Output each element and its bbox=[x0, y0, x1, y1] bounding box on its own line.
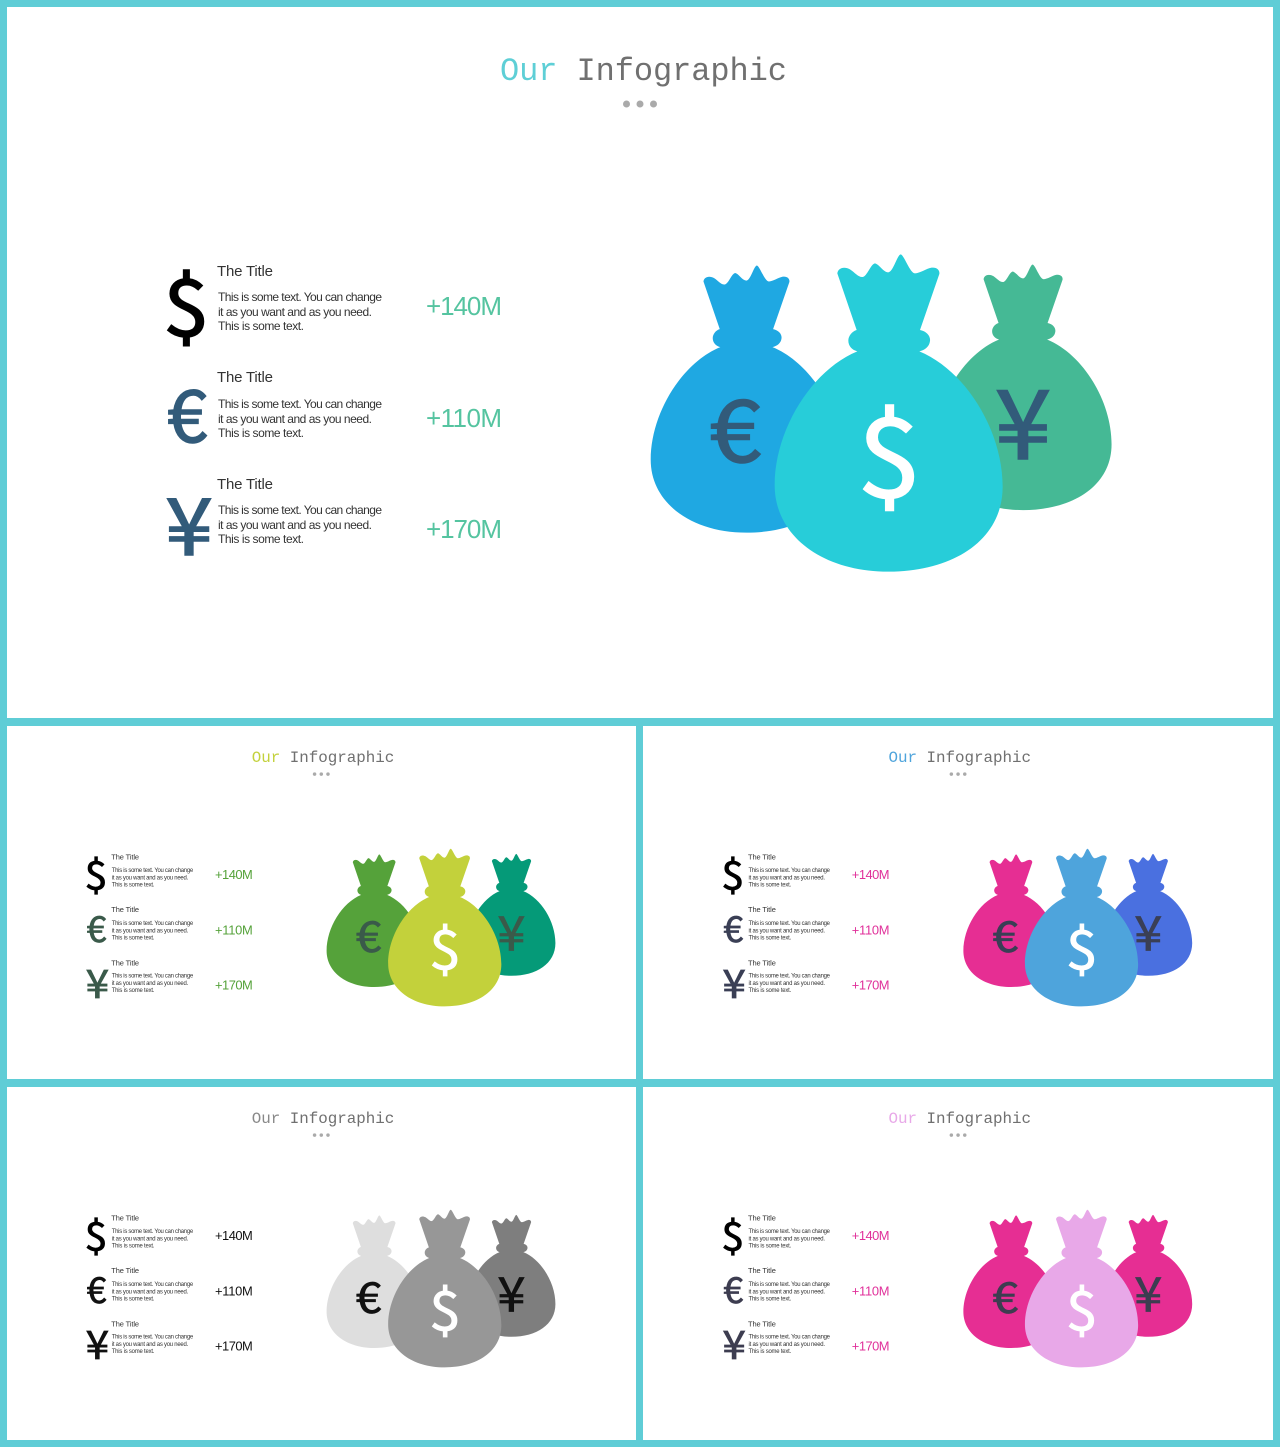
text block: row 3: This is some text. You can change bbox=[112, 1335, 194, 1341]
money bags: € bbox=[992, 902, 1018, 964]
text block: row 2: The Title bbox=[748, 1266, 776, 1275]
text block: row 3: This is some text. bbox=[749, 988, 792, 994]
text block: row 2: This is some text. bbox=[112, 935, 155, 941]
text block: row 3 bbox=[217, 476, 382, 546]
icon: dollar: $ bbox=[721, 1205, 744, 1262]
value: 110M: +110M bbox=[426, 403, 502, 433]
text block: row 3 bbox=[111, 1319, 194, 1355]
text block: row 1: it as you want and as you need. bbox=[749, 1236, 825, 1242]
title: Our Infographic bbox=[500, 53, 787, 90]
money bags: ¥ bbox=[497, 896, 525, 965]
text block: row 3: it as you want and as you need. bbox=[749, 981, 825, 987]
title: Our Infographic bbox=[252, 749, 394, 767]
money bags bbox=[327, 1210, 555, 1367]
title: Our Infographic bbox=[889, 1110, 1031, 1128]
money bags: $ bbox=[1066, 1268, 1098, 1347]
text block: row 3: The Title bbox=[748, 1319, 776, 1328]
money bags: € bbox=[356, 1263, 382, 1325]
text block: row 1: This is some text. bbox=[112, 1243, 155, 1249]
text block: row 1: This is some text. bbox=[749, 882, 792, 888]
value: 110M: +110M bbox=[852, 1284, 890, 1299]
text block: row 2 bbox=[748, 905, 831, 941]
text block: row 1 bbox=[111, 1214, 194, 1249]
text block: row 1: The Title bbox=[748, 853, 776, 862]
text block: row 1 bbox=[111, 853, 194, 888]
text block: row 3 bbox=[748, 1319, 831, 1355]
text block: row 3: The Title bbox=[217, 476, 273, 493]
text block: row 2: This is some text. You can change bbox=[218, 397, 382, 411]
text block: row 2 bbox=[111, 1266, 194, 1302]
panel: main slide, teal bbox=[7, 7, 1273, 718]
text block: row 2: The Title bbox=[217, 369, 273, 386]
icon: yen: ¥ bbox=[165, 464, 213, 578]
text block: row 1: it as you want and as you need. bbox=[112, 875, 189, 881]
text block: row 1 bbox=[217, 263, 382, 333]
text block: row 3: it as you want and as you need. bbox=[112, 1342, 189, 1348]
text block: row 3: it as you want and as you need. bbox=[749, 1342, 825, 1348]
value: 140M: +140M bbox=[426, 291, 502, 321]
text block: row 1: This is some text. You can change bbox=[112, 1229, 194, 1235]
money bags bbox=[963, 1210, 1192, 1367]
text block: row 2: The Title bbox=[748, 905, 776, 914]
text block: row 1: The Title bbox=[217, 263, 273, 280]
text block: row 1 bbox=[748, 853, 831, 888]
value: 140M: +140M bbox=[215, 1228, 253, 1243]
text block: row 2: it as you want and as you need. bbox=[749, 1290, 825, 1296]
text block: row 1: The Title bbox=[111, 1214, 139, 1223]
icon: yen: ¥ bbox=[86, 1314, 109, 1371]
value: 170M: +170M bbox=[852, 1339, 890, 1354]
value: 140M: +140M bbox=[852, 1228, 890, 1243]
text block: row 1: This is some text. You can change bbox=[749, 868, 831, 874]
text block: row 2 bbox=[111, 905, 194, 941]
value: 140M: +140M bbox=[852, 867, 890, 882]
icon: euro: € bbox=[86, 902, 106, 953]
text block: row 3: This is some text. You can change bbox=[112, 974, 194, 980]
text block: row 2: it as you want and as you need. bbox=[112, 929, 189, 935]
text block: row 1: it as you want and as you need. bbox=[218, 305, 372, 319]
icon: dollar: $ bbox=[721, 844, 744, 901]
value: 170M: +170M bbox=[215, 978, 253, 993]
value: 170M: +170M bbox=[215, 1339, 253, 1354]
title: Our Infographic bbox=[889, 749, 1031, 767]
text block: row 3: This is some text. You can change bbox=[218, 503, 382, 517]
icon: yen: ¥ bbox=[722, 953, 746, 1010]
icon: euro: € bbox=[723, 1263, 743, 1314]
text block: row 1: it as you want and as you need. bbox=[749, 875, 825, 881]
text block: row 1: This is some text. bbox=[112, 882, 155, 888]
text block: row 2: This is some text. bbox=[112, 1296, 155, 1302]
icon: euro: € bbox=[167, 358, 207, 463]
text block: row 1: This is some text. bbox=[218, 319, 304, 333]
title dots bbox=[313, 1133, 330, 1137]
text block: row 2 bbox=[217, 369, 382, 440]
money bags bbox=[327, 849, 555, 1006]
money bags: € bbox=[992, 1263, 1018, 1325]
money bags: ¥ bbox=[1134, 1257, 1162, 1326]
icon: dollar: $ bbox=[84, 1205, 107, 1262]
panel: grey variant bbox=[7, 1087, 636, 1440]
text block: row 2: This is some text. You can change bbox=[749, 1282, 831, 1288]
text block: row 3 bbox=[111, 958, 194, 994]
text block: row 3: This is some text. bbox=[749, 1349, 792, 1355]
money bags: $ bbox=[1066, 907, 1098, 986]
money bags: ¥ bbox=[497, 1257, 525, 1326]
text block: row 2 bbox=[748, 1266, 831, 1302]
text block: row 1: This is some text. bbox=[749, 1243, 792, 1249]
text block: row 2: This is some text. bbox=[749, 935, 792, 941]
icon: dollar: $ bbox=[84, 844, 107, 901]
text block: row 3: This is some text. You can change bbox=[749, 974, 831, 980]
title dots bbox=[950, 1133, 967, 1137]
text block: row 1: The Title bbox=[111, 853, 139, 862]
icon: yen: ¥ bbox=[722, 1314, 746, 1371]
text block: row 1: This is some text. You can change bbox=[112, 868, 194, 874]
icon: yen: ¥ bbox=[86, 953, 109, 1010]
panel: green variant bbox=[7, 726, 636, 1079]
text block: row 3: it as you want and as you need. bbox=[218, 518, 372, 532]
text block: row 3: This is some text. bbox=[112, 988, 155, 994]
text block: row 1: This is some text. You can change bbox=[218, 290, 382, 304]
title dots bbox=[623, 100, 657, 108]
icon: euro: € bbox=[723, 902, 743, 953]
money bags: $ bbox=[429, 907, 461, 986]
value: 140M: +140M bbox=[215, 867, 253, 882]
panel: blue and pink variant bbox=[643, 726, 1273, 1079]
text block: row 2: it as you want and as you need. bbox=[218, 412, 372, 426]
text block: row 1: This is some text. You can change bbox=[749, 1229, 831, 1235]
text block: row 3: The Title bbox=[748, 958, 776, 967]
panel: pink variant bbox=[643, 1087, 1273, 1440]
text block: row 3: The Title bbox=[111, 1319, 139, 1328]
text block: row 3: This is some text. You can change bbox=[749, 1335, 831, 1341]
money bags bbox=[651, 254, 1112, 572]
value: 170M: +170M bbox=[426, 514, 502, 544]
icon: dollar: $ bbox=[163, 245, 209, 359]
value: 110M: +110M bbox=[215, 923, 253, 938]
money bags: ¥ bbox=[995, 348, 1051, 487]
text block: row 2: The Title bbox=[111, 905, 139, 914]
text block: row 2: it as you want and as you need. bbox=[112, 1290, 189, 1296]
text block: row 2: This is some text. You can change bbox=[112, 1282, 194, 1288]
text block: row 3: This is some text. bbox=[112, 1349, 155, 1355]
value: 170M: +170M bbox=[852, 978, 890, 993]
money bags: $ bbox=[857, 370, 921, 529]
text block: row 3: it as you want and as you need. bbox=[112, 981, 189, 987]
icon: euro: € bbox=[86, 1263, 106, 1314]
money bags: ¥ bbox=[1134, 896, 1162, 965]
text block: row 2: This is some text. You can change bbox=[749, 921, 831, 927]
text block: row 1: it as you want and as you need. bbox=[112, 1236, 189, 1242]
money bags: € bbox=[709, 362, 761, 487]
text block: row 2: This is some text. You can change bbox=[112, 921, 194, 927]
text block: row 2: This is some text. bbox=[218, 426, 304, 440]
text block: row 3 bbox=[748, 958, 831, 994]
text block: row 2: The Title bbox=[111, 1266, 139, 1275]
text block: row 1 bbox=[748, 1214, 831, 1249]
money bags: $ bbox=[429, 1268, 461, 1347]
text block: row 2: This is some text. bbox=[749, 1296, 792, 1302]
text block: row 3: This is some text. bbox=[218, 532, 304, 546]
text block: row 1: The Title bbox=[748, 1214, 776, 1223]
title dots bbox=[950, 772, 967, 776]
text block: row 2: it as you want and as you need. bbox=[749, 929, 825, 935]
title: Our Infographic bbox=[252, 1110, 394, 1128]
money bags bbox=[963, 849, 1192, 1006]
text block: row 3: The Title bbox=[111, 958, 139, 967]
value: 110M: +110M bbox=[215, 1284, 253, 1299]
money bags: € bbox=[356, 902, 382, 964]
title dots bbox=[313, 772, 330, 776]
value: 110M: +110M bbox=[852, 923, 890, 938]
